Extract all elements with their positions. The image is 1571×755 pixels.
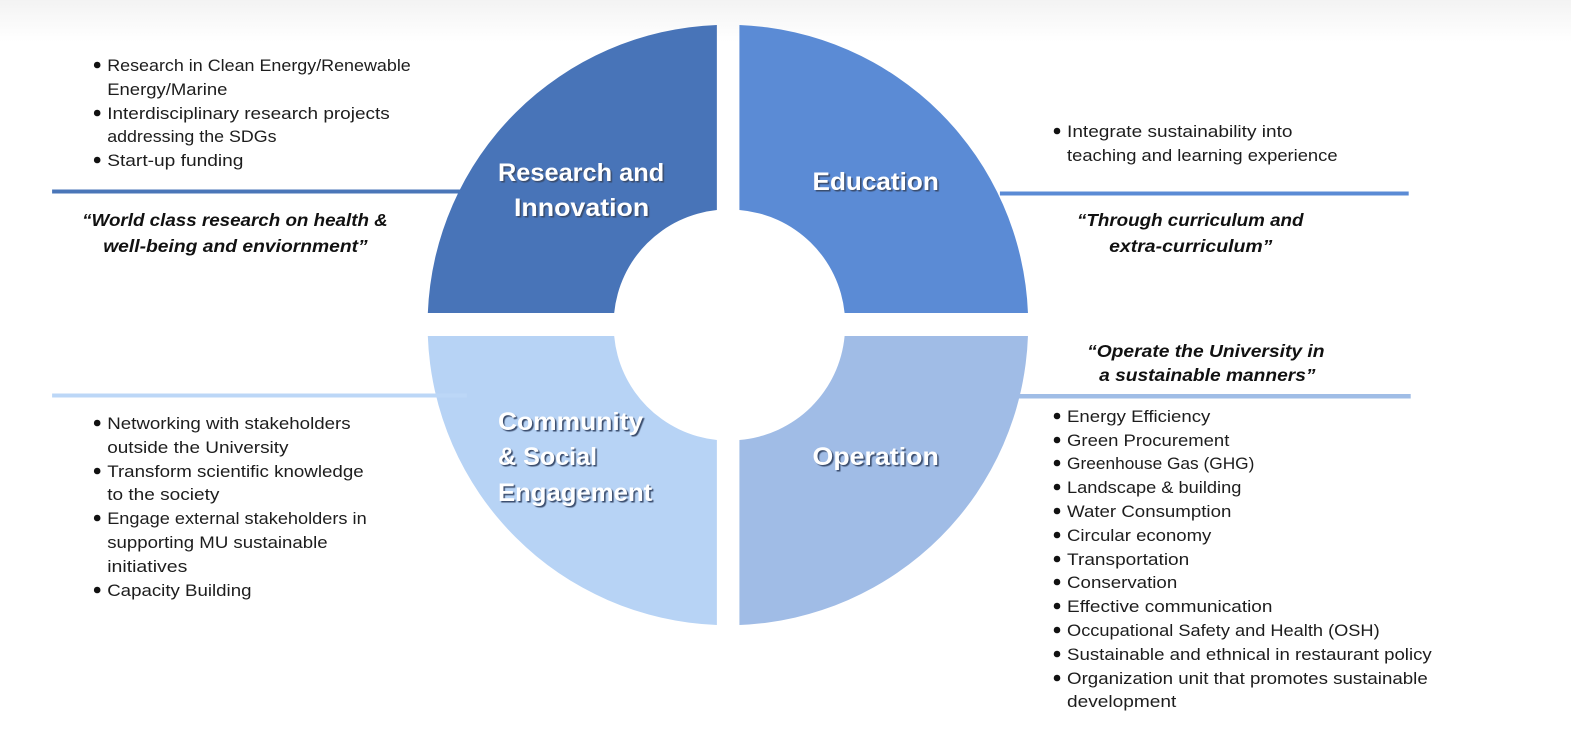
text block: operation bullet list: Organization unit that promotes sustainable bbox=[1067, 669, 1428, 688]
text block: operation bullet list bbox=[1054, 407, 1432, 711]
text block: operation bullet list: Water Consumption bbox=[1067, 502, 1231, 521]
heading: operation: Operation bbox=[813, 443, 939, 471]
heading: community and social engagement bbox=[498, 408, 653, 507]
text block: operation bullet list: Conservation bbox=[1067, 573, 1177, 592]
heading: education: Education bbox=[813, 168, 939, 196]
text block: research bullet list: addressing the SDGs bbox=[107, 127, 277, 146]
heading: community and social engagement: Engagement bbox=[498, 479, 653, 507]
text block: research bullet list: Research in Clean Energy/Renewable bbox=[107, 56, 411, 75]
text block: operation bullet list: Occupational Safety and Health (OSH) bbox=[1067, 621, 1380, 640]
panel: operation quadrant bbox=[739, 336, 1028, 625]
text block: operation bullet list: Greenhouse Gas (GHG) bbox=[1067, 454, 1254, 473]
quote: operation bbox=[1087, 341, 1325, 385]
quote: operation: “Operate the University in bbox=[1087, 341, 1325, 361]
text block: operation bullet list: Circular economy bbox=[1067, 526, 1212, 545]
text block: community bullet list bbox=[94, 414, 367, 600]
quote: research: “World class research on health & bbox=[82, 210, 388, 230]
heading: community and social engagement: Community bbox=[498, 408, 643, 436]
text block: community bullet list: initiatives bbox=[107, 557, 187, 576]
text block: community bullet list: outside the University bbox=[107, 438, 289, 457]
quote: education bbox=[1077, 210, 1305, 256]
connector line: community bbox=[52, 394, 467, 398]
text block: operation bullet list: Landscape & building bbox=[1067, 478, 1241, 497]
quote: research bbox=[82, 210, 388, 256]
text block: research bullet list bbox=[94, 56, 411, 170]
quote: education: “Through curriculum and bbox=[1077, 210, 1305, 230]
panel: community and social engagement quadrant bbox=[52, 336, 717, 625]
connector line: operation bbox=[1018, 394, 1411, 398]
text block: operation bullet list: development bbox=[1067, 692, 1177, 711]
heading: community and social engagement: & Social bbox=[498, 443, 597, 471]
text block: community bullet list: to the society bbox=[107, 485, 220, 504]
quote: education: extra-curriculum” bbox=[1109, 236, 1272, 256]
connector line: research bbox=[52, 190, 461, 194]
text block: community bullet list: supporting MU sustainable bbox=[107, 533, 328, 552]
text block: community bullet list: Engage external stakeholders in bbox=[107, 509, 367, 528]
text block: research bullet list: Interdisciplinary research projects bbox=[107, 104, 390, 123]
text block: research bullet list: Start-up funding bbox=[107, 151, 243, 170]
text block: research bullet list: Energy/Marine bbox=[107, 80, 227, 99]
text block: community bullet list: Capacity Building bbox=[107, 581, 251, 600]
text block: operation bullet list: Effective communication bbox=[1067, 597, 1272, 616]
text block: operation bullet list: Green Procurement bbox=[1067, 431, 1230, 450]
text block: education bullet list bbox=[1054, 122, 1338, 165]
panel: research and innovation quadrant bbox=[428, 25, 717, 313]
text block: community bullet list: Transform scientific knowledge bbox=[107, 462, 364, 481]
text block: community bullet list: Networking with stakeholders bbox=[107, 414, 351, 433]
heading: research and innovation: Innovation bbox=[514, 194, 649, 222]
heading: research and innovation: Research and bbox=[498, 159, 664, 187]
text block: operation bullet list: Transportation bbox=[1067, 550, 1189, 569]
text block: education bullet list: teaching and learning experience bbox=[1067, 146, 1338, 165]
heading: research and innovation bbox=[498, 159, 664, 222]
text block: operation bullet list: Sustainable and ethnical in restaurant policy bbox=[1067, 645, 1432, 664]
text block: education bullet list: Integrate sustainability into bbox=[1067, 122, 1292, 141]
quote: research: well-being and enviornment” bbox=[103, 236, 368, 256]
connector line: education bbox=[1000, 192, 1409, 196]
text block: operation bullet list: Energy Efficiency bbox=[1067, 407, 1211, 426]
quote: operation: a sustainable manners” bbox=[1099, 365, 1316, 385]
panel: education quadrant bbox=[739, 25, 1028, 313]
